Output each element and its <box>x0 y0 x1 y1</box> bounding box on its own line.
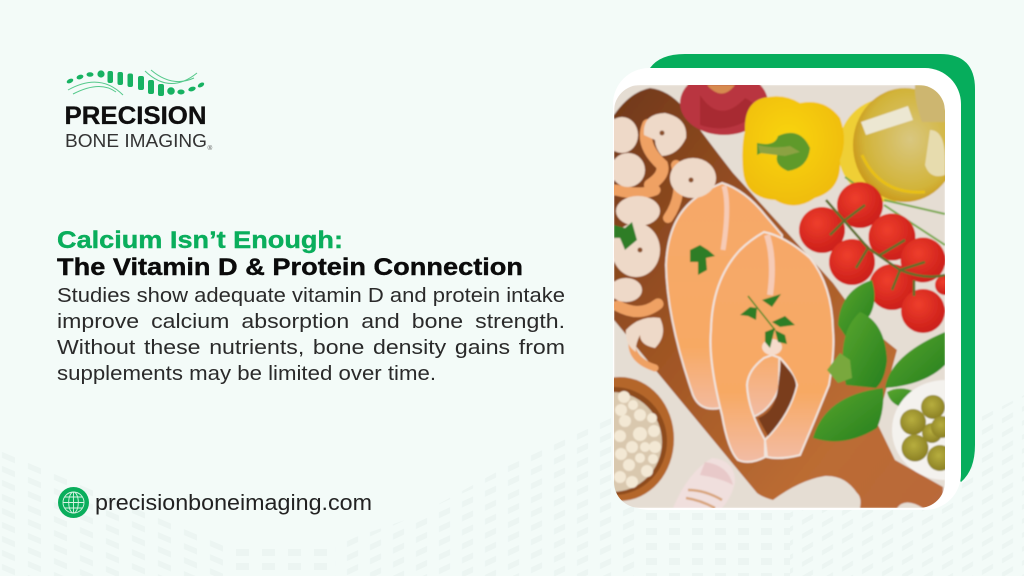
body paragraph: supplements may be limited over time. <box>57 362 436 385</box>
logo <box>64 70 212 152</box>
heading <box>57 227 523 281</box>
cutting board <box>614 88 943 508</box>
shrimp <box>606 113 716 368</box>
body paragraph: Studies show adequate vitamin D and protein intake <box>57 284 565 307</box>
website row <box>58 487 372 518</box>
white frame <box>613 68 961 510</box>
background dash wave pattern <box>0 395 1024 576</box>
onion <box>679 85 768 136</box>
body paragraph: Without these nutrients, bone density gains from <box>57 336 565 359</box>
chives <box>845 177 945 245</box>
parsley on front steak <box>740 294 795 348</box>
logo: spine mark <box>66 70 205 96</box>
icon: globe <box>58 487 89 518</box>
tomatoes <box>799 182 955 333</box>
table surface <box>614 85 945 508</box>
logo: BONE IMAGING <box>65 131 207 151</box>
website url: precisionboneimaging.com <box>95 490 372 515</box>
logo: wordmark: PRECISION <box>64 102 206 130</box>
logo: arcs <box>68 70 197 95</box>
chickpea bowl <box>614 376 675 502</box>
image frame <box>613 54 975 510</box>
shrimp dark veins <box>638 130 694 252</box>
salmon steak back <box>666 183 782 418</box>
heading: Calcium Isn’t Enough: <box>57 227 343 254</box>
salmon centre cavity <box>758 362 796 436</box>
tomato vine <box>826 200 945 296</box>
shrimp orange bodies <box>616 125 679 368</box>
yellow pepper <box>742 96 844 206</box>
garlic <box>673 458 735 508</box>
shrimp pale curls <box>606 113 716 352</box>
parsley on shrimp <box>614 222 637 250</box>
food photo <box>614 85 945 508</box>
parsley sprig <box>827 353 852 383</box>
olive bowl <box>892 380 945 480</box>
green backing panel <box>650 54 975 482</box>
body paragraph <box>57 284 565 385</box>
logo: ® <box>208 144 212 152</box>
parsley on back steak <box>690 245 715 275</box>
heading: The Vitamin D & Protein Connection <box>57 254 523 281</box>
body paragraph: improve calcium absorption and bone strength. <box>57 310 565 333</box>
basil leaves <box>813 280 945 441</box>
salmon steak front <box>710 232 834 462</box>
oil bottle <box>838 85 957 202</box>
